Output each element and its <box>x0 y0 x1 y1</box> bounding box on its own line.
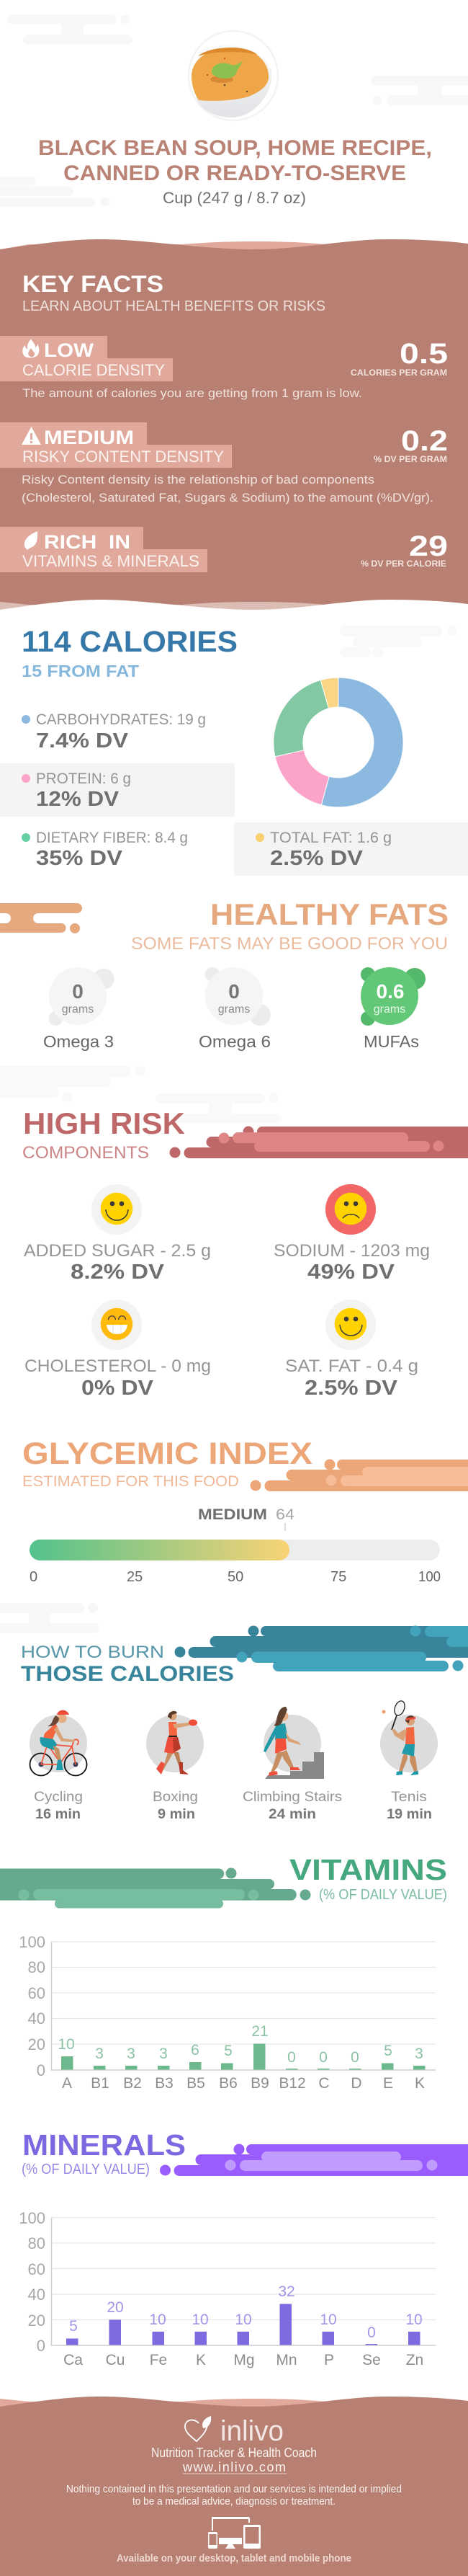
serving size: Cup (247 g / 8.7 oz) <box>163 189 306 207</box>
label: tennis: 19 min <box>387 1807 432 1822</box>
availability note: Available on your desktop, tablet and mobile phone <box>117 2553 351 2564</box>
stat: omega 3: 0 <box>72 980 84 1003</box>
vitamins bar chart: 40 <box>28 2009 45 2028</box>
minerals bar chart: 20 <box>107 2299 124 2316</box>
label: cycling: 16 min <box>35 1807 81 1822</box>
stat: mufas: 0.6 <box>377 980 404 1003</box>
stat: omega 3 <box>43 967 114 1051</box>
stat: omega 6 <box>199 967 271 1051</box>
healthy fats subheading: SOME FATS MAY BE GOOD FOR YOU <box>131 934 448 954</box>
panel: glycemic index <box>22 1436 468 1585</box>
item: cholesterol: 0% DV <box>81 1377 154 1400</box>
activity: boxing <box>146 1711 204 1822</box>
title: BLACK BEAN SOUP, HOME RECIPE, <box>38 136 432 160</box>
label: tennis <box>387 1790 432 1822</box>
vitamins bar chart: B3 <box>155 2075 174 2092</box>
minerals bar chart: 40 <box>28 2286 45 2304</box>
stat: mufas <box>361 967 426 1051</box>
gauge scale labels <box>30 1569 441 1585</box>
item: added sugar: 8.2% DV <box>71 1261 165 1284</box>
disclaimer <box>66 2484 402 2508</box>
label: tennis: Tenis <box>391 1790 427 1805</box>
minerals bar chart: 100 <box>19 2209 45 2227</box>
minerals bar chart: 10 <box>235 2311 252 2328</box>
title: CANNED OR READY-TO-SERVE <box>63 161 406 185</box>
item: sodium <box>274 1184 430 1284</box>
vitamins bar chart: K <box>415 2075 425 2092</box>
glycemic gauge bar <box>30 1540 440 1560</box>
label: cycling: Cycling <box>34 1790 83 1805</box>
minerals subheading: (% OF DAILY VALUE) <box>22 2162 150 2177</box>
decorative clouds: header <box>0 14 468 207</box>
minerals bar chart: 60 <box>28 2260 45 2278</box>
vitamins bar chart: 0 <box>37 2061 45 2079</box>
minerals bar chart: 10 <box>405 2311 423 2328</box>
activity: tennis <box>380 1700 438 1822</box>
fact: rich in vitamins and minerals <box>0 527 448 572</box>
label: cycling <box>34 1790 83 1822</box>
stat: mufas: MUFAs <box>364 1032 419 1051</box>
logo wordmark: inlivo <box>220 2415 284 2447</box>
glycemic value label: 64 <box>276 1506 294 1523</box>
fact: low calorie density: The amount of calories you are getting from 1 gram is low. <box>22 386 362 400</box>
legend: total fat <box>234 822 468 876</box>
vitamins bar chart: 6 <box>191 2042 199 2058</box>
vitamins bar chart: D <box>351 2075 362 2092</box>
gauge scale labels: 50 <box>228 1569 243 1585</box>
item: added sugar <box>24 1184 211 1284</box>
title <box>38 136 432 185</box>
minerals bar chart: Ca <box>63 2352 83 2368</box>
minerals bar chart <box>19 2209 436 2368</box>
accent cloud: burn <box>174 1626 468 1671</box>
vitamins bar chart: 3 <box>95 2046 104 2062</box>
icon: soup bowl <box>189 31 278 120</box>
gauge scale labels: 0 <box>30 1569 37 1585</box>
stat: omega 3: Omega 3 <box>43 1032 114 1051</box>
label: boxing <box>153 1790 198 1822</box>
label: climbing stairs: 24 min <box>269 1807 316 1822</box>
tagline: Nutrition Tracker & Health Coach <box>151 2446 317 2460</box>
item: added sugar: ADDED SUGAR - 2.5 g <box>24 1241 211 1261</box>
legend: protein: PROTEIN: 6 g <box>36 770 131 787</box>
minerals bar chart: 10 <box>320 2311 337 2328</box>
label: boxing: Boxing <box>153 1790 198 1805</box>
decorative cloud: calories <box>340 626 457 657</box>
panel: minerals <box>19 2128 468 2368</box>
minerals bar chart: Zn <box>406 2352 423 2368</box>
legend: dietary fiber: 35% DV <box>36 847 123 870</box>
minerals bar chart: 80 <box>28 2234 45 2252</box>
panel: vitamins <box>0 1853 447 2092</box>
legend: total fat: TOTAL FAT: 1.6 g <box>270 830 392 846</box>
item: saturated fat: SAT. FAT - 0.4 g <box>285 1356 418 1376</box>
vitamins bar chart: 80 <box>28 1958 45 1976</box>
accent cloud: healthy fats <box>0 903 82 933</box>
fact: medium risky content density: 0.2 <box>401 425 448 457</box>
healthy fats heading: HEALTHY FATS <box>210 897 449 931</box>
item: saturated fat <box>285 1300 418 1400</box>
icon: devices <box>208 2517 261 2549</box>
label: climbing stairs <box>243 1790 342 1822</box>
wave divider below key facts <box>0 600 468 620</box>
glycemic index heading: GLYCEMIC INDEX <box>22 1436 312 1471</box>
fact: rich in vitamins and minerals: 29 <box>409 530 448 562</box>
key facts subheading: LEARN ABOUT HEALTH BENEFITS OR RISKS <box>22 298 325 314</box>
stat: omega 3: grams <box>62 1003 94 1016</box>
fact: low calorie density: CALORIE DENSITY <box>22 361 165 379</box>
gauge scale labels: 75 <box>330 1569 346 1585</box>
vitamins bar chart: E <box>383 2075 393 2092</box>
decorative cloud: above burn section <box>0 1603 99 1633</box>
vitamins bar chart: 5 <box>224 2043 233 2059</box>
stat: omega 6: grams <box>218 1003 250 1016</box>
vitamins bar chart: B1 <box>91 2075 109 2092</box>
from fat subheading: 15 FROM FAT <box>22 662 139 680</box>
vitamins bar chart: 100 <box>19 1933 45 1951</box>
calories heading: 114 CALORIES <box>22 625 238 658</box>
glycemic value label: MEDIUM <box>198 1506 267 1523</box>
glycemic index subheading: ESTIMATED FOR THIS FOOD <box>22 1473 239 1490</box>
panel: how to burn calories <box>21 1626 468 1822</box>
vitamins bar chart: B12 <box>279 2075 306 2092</box>
disclaimer: Nothing contained in this presentation and our services is intended or implied <box>66 2484 402 2495</box>
vitamins bar chart: 60 <box>28 1984 45 2002</box>
minerals bar chart: Cu <box>106 2352 125 2368</box>
burn heading: HOW TO BURN <box>21 1643 164 1662</box>
minerals bar chart: 0 <box>367 2324 376 2341</box>
minerals bar chart: 32 <box>278 2283 295 2300</box>
minerals bar chart: 10 <box>192 2311 209 2328</box>
fact: rich in vitamins and minerals: VITAMINS & MINERALS <box>22 552 199 570</box>
vitamins bar chart: B2 <box>123 2075 142 2092</box>
website link: www.inlivo.com <box>182 2460 286 2474</box>
minerals bar chart: 0 <box>37 2337 45 2355</box>
item: cholesterol: CHOLESTEROL - 0 mg <box>24 1356 211 1376</box>
fact: low calorie density: CALORIES PER GRAM <box>351 368 447 378</box>
item: cholesterol <box>24 1300 211 1400</box>
accent cloud: high risk <box>170 1126 468 1158</box>
key facts heading: KEY FACTS <box>22 271 163 297</box>
fact: medium risky content density: (Cholesterol, Saturated Fat, Sugars & Sodium) to the amount (%DV/gr). <box>22 491 433 505</box>
vitamins bar chart: 10 <box>58 2036 75 2053</box>
panel: high risk components <box>22 1106 468 1400</box>
fact: rich in vitamins and minerals: % DV PER CALORIE <box>361 559 446 569</box>
minerals bar chart: P <box>324 2352 334 2368</box>
fact: medium risky content density: RISKY CONTENT DENSITY <box>22 448 224 466</box>
fact: low calorie density: LOW <box>44 339 94 361</box>
item: sodium: 49% DV <box>307 1261 395 1284</box>
panel: key facts <box>0 239 468 613</box>
fact: medium risky content density <box>0 422 448 505</box>
disclaimer: to be a medical advice, diagnosis or treatment. <box>132 2496 336 2508</box>
legend: dietary fiber: DIETARY FIBER: 8.4 g <box>36 830 188 846</box>
label: climbing stairs: Climbing Stairs <box>243 1790 342 1805</box>
panel: calories <box>0 625 468 876</box>
fact: rich in vitamins and minerals: RICH IN <box>44 531 130 553</box>
accent cloud: minerals <box>160 2144 468 2176</box>
activity: cycling <box>30 1710 87 1822</box>
vitamins heading: VITAMINS <box>289 1853 447 1886</box>
burn heading bold line: THOSE CALORIES <box>21 1662 234 1686</box>
vitamins bar chart: B5 <box>186 2075 205 2092</box>
vitamins bar chart: 3 <box>159 2046 168 2062</box>
accent cloud: glycemic index <box>251 1459 468 1491</box>
high risk subheading: COMPONENTS <box>22 1143 149 1163</box>
minerals bar chart: 5 <box>69 2318 78 2335</box>
glycemic value label <box>198 1506 294 1531</box>
vitamins bar chart: 0 <box>351 2049 359 2066</box>
minerals bar chart: K <box>196 2352 206 2368</box>
fact: medium risky content density: % DV PER GRAM <box>374 454 447 464</box>
vitamins bar chart: B6 <box>219 2075 238 2092</box>
high risk heading: HIGH RISK <box>23 1106 185 1140</box>
minerals bar chart: Se <box>362 2352 381 2368</box>
legend: total fat: 2.5% DV <box>270 847 364 870</box>
minerals bar chart: Mn <box>276 2352 297 2368</box>
gauge scale labels: 100 <box>418 1569 441 1585</box>
minerals bar chart: 10 <box>149 2311 166 2328</box>
macronutrient donut chart <box>274 678 403 807</box>
item: sodium: SODIUM - 1203 mg <box>274 1241 430 1261</box>
accent cloud: vitamins <box>0 1868 311 1909</box>
stat: mufas: grams <box>374 1003 405 1016</box>
vitamins bar chart: C <box>318 2075 330 2092</box>
label: boxing: 9 min <box>158 1807 195 1822</box>
decorative clouds: above high risk <box>0 1066 281 1123</box>
minerals bar chart: Mg <box>233 2352 255 2368</box>
vitamins bar chart: 0 <box>287 2049 296 2066</box>
vitamins bar chart: 5 <box>384 2043 392 2059</box>
minerals heading: MINERALS <box>22 2128 186 2162</box>
legend: carbohydrates <box>22 711 206 752</box>
legend: protein: 12% DV <box>36 788 120 811</box>
minerals bar chart: 20 <box>28 2311 45 2329</box>
vitamins subheading: (% OF DAILY VALUE) <box>319 1887 447 1903</box>
vitamins bar chart <box>19 1933 436 2092</box>
icon: inlivo logo <box>185 2415 284 2447</box>
legend: carbohydrates: 7.4% DV <box>36 729 129 752</box>
vitamins bar chart: 0 <box>319 2049 328 2066</box>
legend: dietary fiber <box>22 830 188 870</box>
activity: climbing stairs <box>243 1707 342 1822</box>
vitamins bar chart: 3 <box>127 2046 135 2062</box>
item: saturated fat: 2.5% DV <box>305 1377 398 1400</box>
vitamins bar chart: B9 <box>251 2075 269 2092</box>
panel: healthy fats <box>0 897 449 1051</box>
fact: medium risky content density: Risky Content density is the relationship of bad components <box>22 473 374 487</box>
vitamins bar chart: 3 <box>415 2046 423 2062</box>
stat: omega 6: 0 <box>228 980 240 1003</box>
legend: protein <box>0 763 235 817</box>
panel: footer <box>0 2397 468 2576</box>
vitamins bar chart: 20 <box>28 2035 45 2053</box>
minerals bar chart: Fe <box>150 2352 167 2368</box>
fact: low calorie density: 0.5 <box>400 338 448 370</box>
legend: carbohydrates: CARBOHYDRATES: 19 g <box>36 711 206 728</box>
fact: medium risky content density: MEDIUM <box>44 427 134 448</box>
fact: low calorie density <box>0 336 448 400</box>
stat: omega 6: Omega 6 <box>199 1032 271 1051</box>
vitamins bar chart: A <box>62 2075 72 2092</box>
gauge scale labels: 25 <box>127 1569 143 1585</box>
vitamins bar chart: 21 <box>251 2023 269 2040</box>
